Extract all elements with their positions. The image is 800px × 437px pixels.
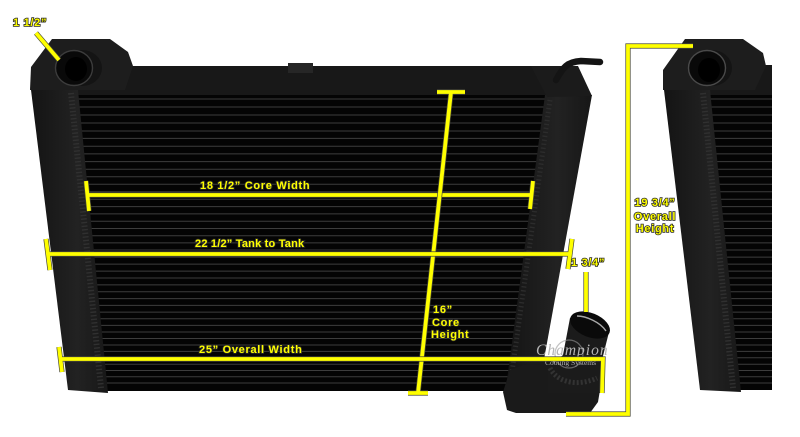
side top cap — [663, 39, 766, 90]
dimension: 25 inch overall width: 25” Overall Width — [199, 344, 302, 356]
dimension: 16 inch core height: 16” — [433, 304, 453, 316]
radiator: main front view — [30, 39, 610, 413]
left top cap — [30, 39, 133, 90]
dimension: 19 3/4 inch overall height: Overall — [634, 211, 676, 223]
side tank — [664, 90, 741, 392]
dimension: 1 3/4 inch outlet — [571, 257, 605, 312]
right tank serrated weld — [512, 100, 550, 372]
dimension: 1 1/2 inch inlet — [13, 17, 59, 60]
dimension: 18 1/2 inch core width: 18 1/2” Core Width — [200, 180, 310, 192]
dimension: 16 inch core height: Core — [432, 317, 460, 329]
overflow hose — [556, 61, 600, 80]
side tank weld — [703, 93, 733, 388]
dimension: 19 3/4 inch overall height: 19 3/4” — [635, 197, 675, 209]
left inlet neck — [56, 50, 102, 86]
side core with fins — [710, 95, 772, 390]
side inlet neck — [688, 50, 732, 86]
dimension: 19 3/4 inch overall height — [566, 46, 693, 414]
watermark: Champion Cooling Systems: Cooling Systems — [545, 358, 596, 367]
dimension: 16 inch core height: Height — [431, 329, 469, 341]
dimension: 19 3/4 inch overall height: Height — [636, 223, 674, 235]
dimension: 22 1/2 inch tank to tank: 22 1/2” Tank to Tank — [195, 238, 305, 250]
side top bar — [710, 65, 772, 95]
radiator: side detail view — [663, 39, 772, 392]
dimension: 18 1/2 inch core width — [86, 180, 533, 211]
dimension: 22 1/2 inch tank to tank — [46, 238, 572, 270]
top header bar — [70, 66, 550, 95]
lower tank — [503, 357, 600, 413]
filler neck tab — [288, 63, 313, 73]
left tank — [31, 90, 108, 393]
radiator core with fins — [78, 95, 545, 391]
dimension: 1 3/4 inch outlet: 1 3/4” — [571, 257, 605, 269]
dimension: 16 inch core height — [408, 92, 469, 393]
dimension: 25 inch overall width — [59, 344, 603, 393]
watermark: Champion Cooling Systems — [536, 340, 609, 368]
right tank — [505, 95, 592, 395]
watermark: Champion Cooling Systems: Champion — [536, 342, 609, 359]
left tank serrated weld — [71, 93, 101, 388]
lower outlet fitting — [548, 306, 614, 393]
dimension: 1 1/2 inch inlet: 1 1/2” — [13, 17, 47, 29]
right top cap — [531, 66, 592, 97]
